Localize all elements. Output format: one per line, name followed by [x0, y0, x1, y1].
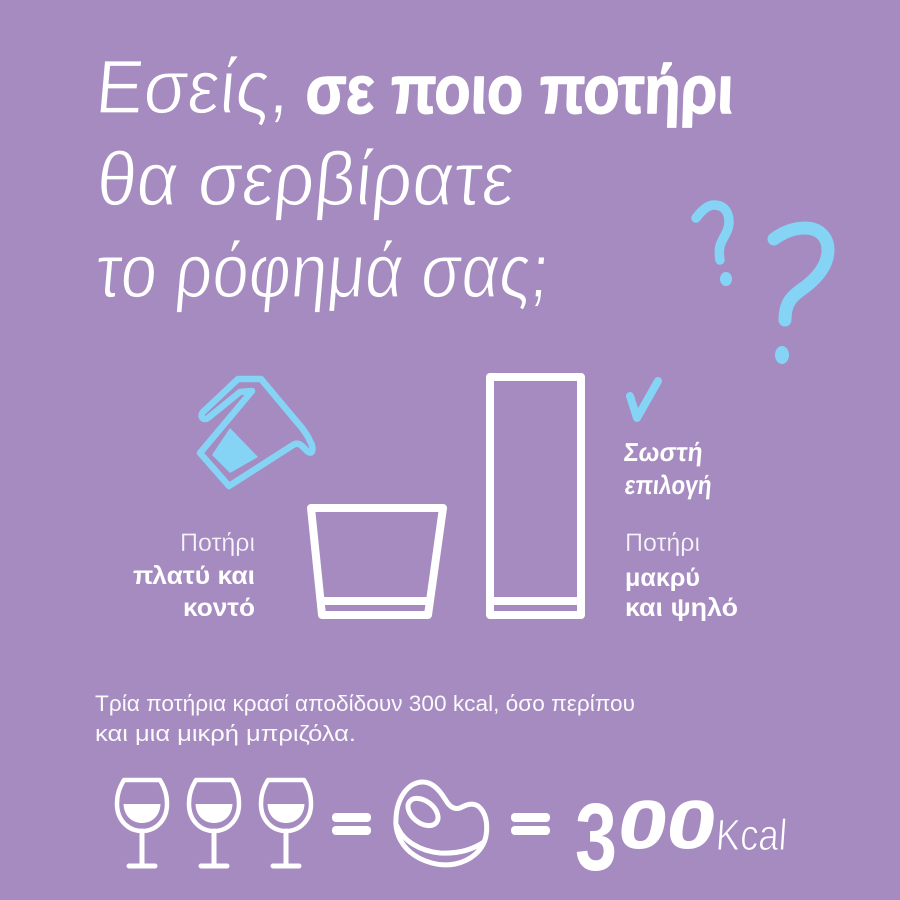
- icon: question marks: [696, 205, 828, 364]
- label: tall glass: μακρύ: [625, 564, 700, 592]
- icon: tall glass: [490, 377, 581, 615]
- label: wide short glass: [133, 529, 255, 622]
- title: σε ποιο ποτήρι: [304, 52, 735, 128]
- label: tall glass: [625, 529, 738, 622]
- label: wide short glass: κοντό: [183, 594, 255, 622]
- label: wide short glass: Ποτήρι: [180, 529, 255, 557]
- callout: 300 Kcal: 00: [612, 786, 723, 863]
- callout: 300 Kcal: Kcal: [714, 811, 789, 860]
- label: correct choice: [622, 437, 713, 500]
- icon: pouring jug: [200, 379, 312, 486]
- title: θα σερβίρατε: [94, 137, 518, 222]
- text block: calories note: [95, 691, 635, 746]
- icon: check mark: [630, 381, 658, 418]
- icon: wine glass 3: [261, 780, 311, 866]
- icon: first equals sign: [332, 813, 371, 835]
- callout: 300 Kcal: 3: [575, 784, 617, 891]
- label: correct choice: Σωστή: [622, 437, 704, 467]
- title: το ρόφημά σας;: [93, 229, 553, 314]
- label: correct choice: επιλογή: [623, 470, 713, 500]
- title: [93, 45, 735, 314]
- icon: second equals sign: [511, 813, 550, 835]
- icon: wine glass 1: [117, 780, 167, 866]
- label: tall glass: και ψηλό: [625, 594, 738, 622]
- icon: steak: [396, 782, 487, 865]
- icon: wide short glass: [311, 508, 443, 615]
- title: Εσείς,: [93, 45, 294, 130]
- text block: calories note: και μια μικρή μπριζόλα.: [95, 721, 356, 746]
- icon: wine glass 2: [189, 780, 239, 866]
- text block: calories note: Τρία ποτήρια κρασί αποδίδουν 300 kcal, όσο περίπου: [95, 691, 635, 716]
- callout: 300 Kcal: [575, 784, 789, 891]
- label: wide short glass: πλατύ και: [133, 562, 255, 590]
- label: tall glass: Ποτήρι: [625, 529, 700, 557]
